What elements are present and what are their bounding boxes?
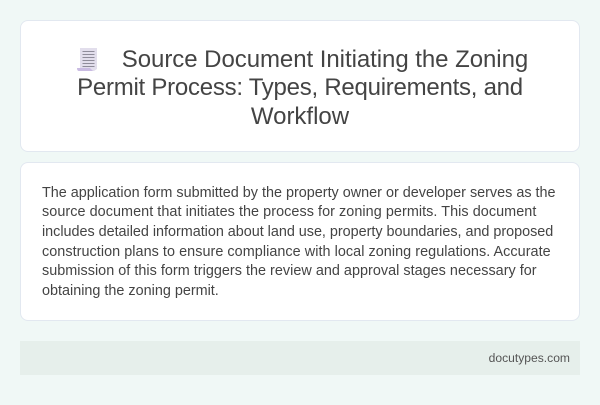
text block: description: The application form submitted by the property owner or developer serves as the <box>42 185 556 201</box>
text block: description: construction plans to ensure compliance with local zoning regulations. Accurate <box>42 244 551 260</box>
title <box>77 46 528 130</box>
text block: description <box>42 185 556 299</box>
text block: description: submission of this form triggers the review and approval stages necessary for <box>42 263 537 279</box>
text block: description: obtaining the zoning permit. <box>42 283 219 299</box>
title: Permit Process: Types, Requirements, and <box>77 74 523 101</box>
title: Source Document Initiating the Zoning <box>122 46 528 73</box>
icon: document scroll <box>77 48 97 71</box>
panel: description card <box>20 162 580 321</box>
footer text: docutypes.com <box>489 351 570 365</box>
panel: title card <box>20 20 580 152</box>
text block: description: includes detailed information about land use, property boundaries, and proposed <box>42 224 553 240</box>
footer bar <box>20 341 580 375</box>
text block: description: source document that initiates the process for zoning permits. This document <box>42 204 536 220</box>
title: Workflow <box>251 103 349 130</box>
